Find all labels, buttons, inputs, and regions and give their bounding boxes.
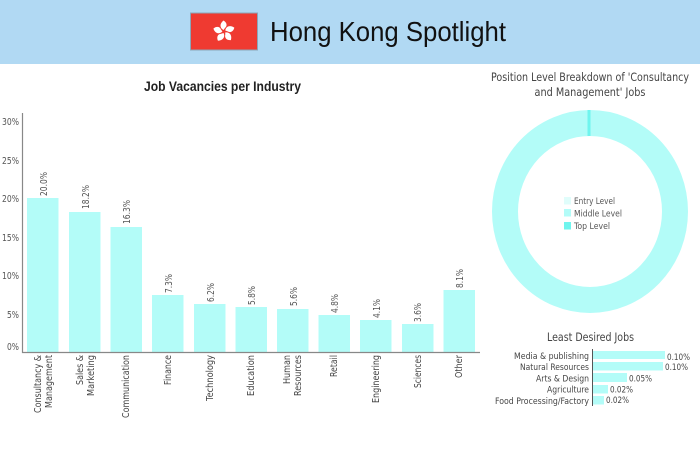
category labels: Sales & (75, 355, 86, 385)
bar value labels: 18.2% (81, 185, 92, 209)
title: Hong Kong Spotlight (270, 16, 506, 47)
category labels: Retail (329, 355, 340, 377)
category labels: Management (44, 355, 55, 408)
icon: Hong Kong flag (190, 13, 258, 50)
header banner (0, 0, 700, 64)
vertical axis (592, 349, 594, 406)
y axis labels: 25% (2, 156, 19, 167)
least desired heading: Least Desired Jobs (547, 330, 634, 344)
y axis labels: 15% (2, 233, 19, 244)
job labels: Natural Resources (520, 363, 589, 373)
bar value labels: 16.3% (122, 200, 133, 224)
chart heading: Job Vacancies per Industry (144, 79, 301, 94)
category labels: Human (282, 355, 293, 384)
value labels: 0.10% (665, 363, 688, 373)
y axis labels: 10% (2, 271, 19, 282)
value labels: 0.02% (606, 396, 629, 406)
category labels: Sciences (413, 355, 424, 388)
horizontal bars (593, 351, 665, 404)
bar value labels: 3.6% (413, 303, 424, 322)
category labels: Finance (163, 355, 174, 385)
job labels: Media & publishing (514, 352, 589, 362)
category labels: Other (454, 355, 465, 378)
value labels: 0.05% (629, 374, 652, 384)
bar value labels: 7.3% (164, 274, 175, 293)
category labels (33, 355, 465, 418)
bar value labels: 5.6% (289, 287, 300, 306)
y axis labels: 5% (7, 310, 19, 321)
value labels: 0.02% (610, 386, 633, 396)
category labels: Engineering (371, 355, 382, 403)
donut chart panel: position level breakdown (491, 70, 689, 300)
axes (22, 113, 480, 352)
y axis labels (2, 117, 19, 353)
donut legend: Top Level (573, 222, 610, 232)
bar value labels (39, 172, 466, 322)
job labels: Food Processing/Factory (495, 397, 590, 407)
horizontal bar chart: least desired jobs (495, 330, 690, 407)
donut ring (505, 123, 675, 300)
top level slice (588, 110, 590, 136)
category labels: Education (246, 355, 257, 396)
category labels: Technology (205, 355, 216, 402)
value labels: 0.10% (667, 353, 690, 363)
value labels (606, 353, 690, 406)
y axis labels: 20% (2, 194, 19, 205)
bar value labels: 8.1% (455, 269, 466, 288)
bar value labels: 5.8% (247, 286, 258, 305)
job labels: Agriculture (547, 386, 589, 396)
donut heading: and Management' Jobs (534, 85, 646, 99)
category labels: Consultancy & (33, 355, 44, 413)
donut legend: Middle Level (574, 210, 622, 220)
bar value labels: 4.8% (330, 294, 341, 313)
job labels: Arts & Design (536, 374, 589, 384)
bar value labels: 6.2% (206, 283, 217, 302)
category labels: Communication (121, 355, 132, 418)
donut legend: Entry Level (574, 197, 615, 207)
bar chart: job vacancies per industry (2, 79, 480, 418)
bars (27, 198, 475, 352)
donut legend (564, 197, 622, 232)
bar value labels: 4.1% (372, 299, 383, 318)
bar value labels: 20.0% (39, 172, 50, 196)
y axis labels: 30% (2, 117, 19, 128)
category labels: Resources (293, 355, 304, 396)
y axis labels: 0% (7, 342, 19, 353)
job labels (495, 352, 590, 407)
category labels: Marketing (86, 355, 97, 396)
